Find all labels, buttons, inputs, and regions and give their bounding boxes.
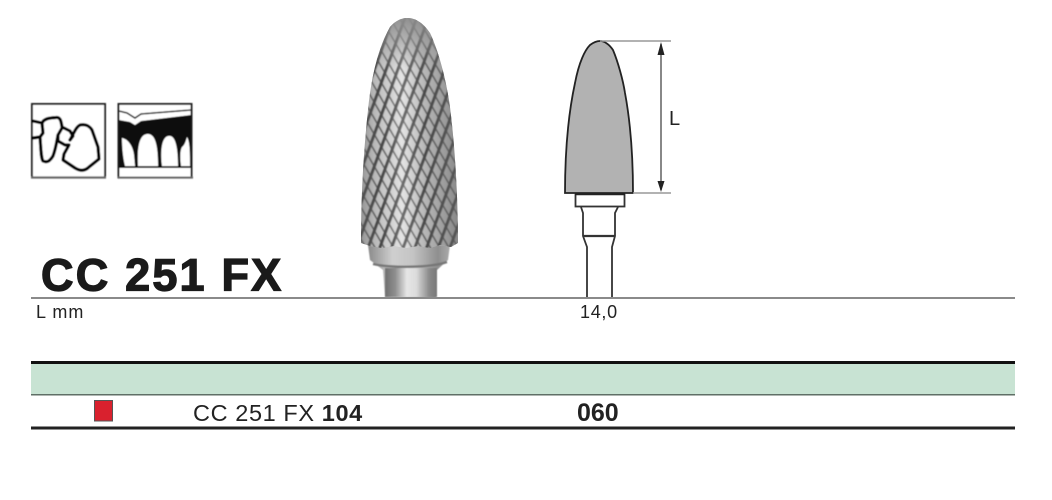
diagram: technical outline of bur <box>565 41 680 297</box>
illustration: carbide bur photo <box>361 18 458 297</box>
row: size 060: 060 <box>577 399 619 427</box>
bur cutting head <box>361 18 458 248</box>
head silhouette <box>565 41 633 193</box>
dimension L: L <box>669 108 680 130</box>
icon: crown and post application <box>31 104 106 178</box>
title: CC 251 FX <box>41 250 283 300</box>
dimension L <box>600 41 680 193</box>
table <box>31 361 1015 430</box>
icon: gum and teeth application <box>118 104 193 178</box>
row: order code: CC 251 FX 104 <box>193 400 363 426</box>
green header band <box>31 364 1015 394</box>
collar and neck <box>575 194 625 297</box>
bur neck and shank <box>368 245 450 298</box>
row: red grit marker <box>94 400 112 421</box>
teeth <box>122 134 190 166</box>
label: L mm: L mm <box>36 302 84 322</box>
value: 14,0: 14,0 <box>580 302 618 322</box>
baseline rule <box>31 297 1015 299</box>
